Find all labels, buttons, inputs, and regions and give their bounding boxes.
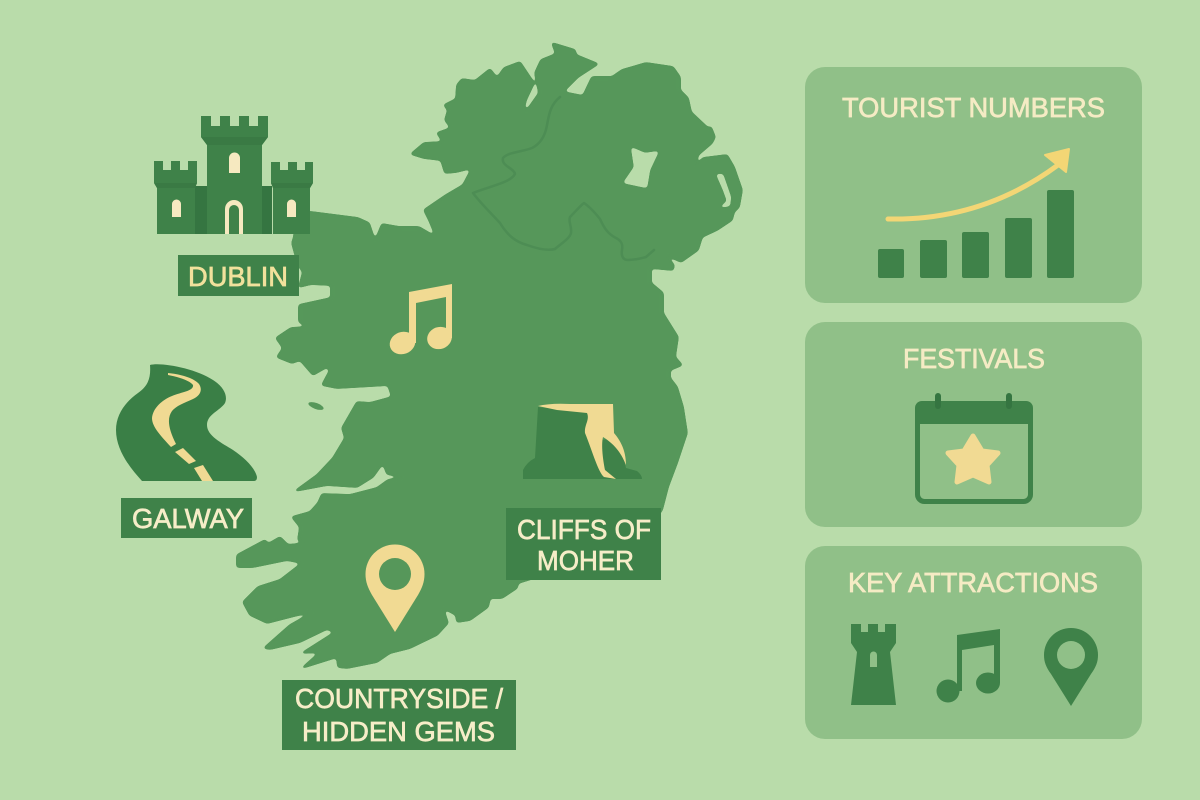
label: Cliffs of Moher: CLIFFS OF (517, 514, 651, 545)
panel: festivals (805, 322, 1142, 527)
arrow: upward trend (888, 149, 1069, 219)
icon: calendar (915, 393, 1033, 502)
icon: castle (154, 116, 313, 234)
icon: winding road (116, 364, 257, 481)
label: Galway (121, 498, 252, 538)
heading: key attractions: KEY ATTRACTIONS (848, 567, 1098, 598)
Strangford Lough (716, 174, 731, 208)
icon: music note (936, 629, 1000, 702)
icon: tower (851, 624, 896, 705)
map of Ireland (237, 43, 742, 668)
label: Countryside / Hidden Gems: COUNTRYSIDE / (295, 683, 503, 714)
heading: festivals: FESTIVALS (903, 343, 1045, 374)
label: Countryside / Hidden Gems (282, 680, 516, 750)
label: Dublin (178, 255, 299, 296)
icon: cliffs (523, 404, 642, 479)
label: Countryside / Hidden Gems: HIDDEN GEMS (302, 716, 495, 747)
icon: location pin on map (366, 544, 424, 632)
border line (473, 97, 654, 260)
heading: tourist numbers: TOURIST NUMBERS (842, 92, 1105, 123)
bar chart (878, 190, 1074, 278)
label: Galway: GALWAY (132, 503, 244, 534)
panel: tourist numbers (805, 67, 1142, 303)
island (307, 400, 325, 412)
label: Cliffs of Moher: MOHER (537, 545, 634, 576)
icon: music note on map (387, 284, 455, 358)
icon: location pin (1044, 628, 1098, 706)
panel: key attractions (805, 546, 1142, 739)
Lough Neagh (623, 147, 659, 188)
label: Dublin: DUBLIN (188, 261, 288, 292)
label: Cliffs of Moher (506, 508, 661, 580)
icon: star (948, 436, 998, 482)
